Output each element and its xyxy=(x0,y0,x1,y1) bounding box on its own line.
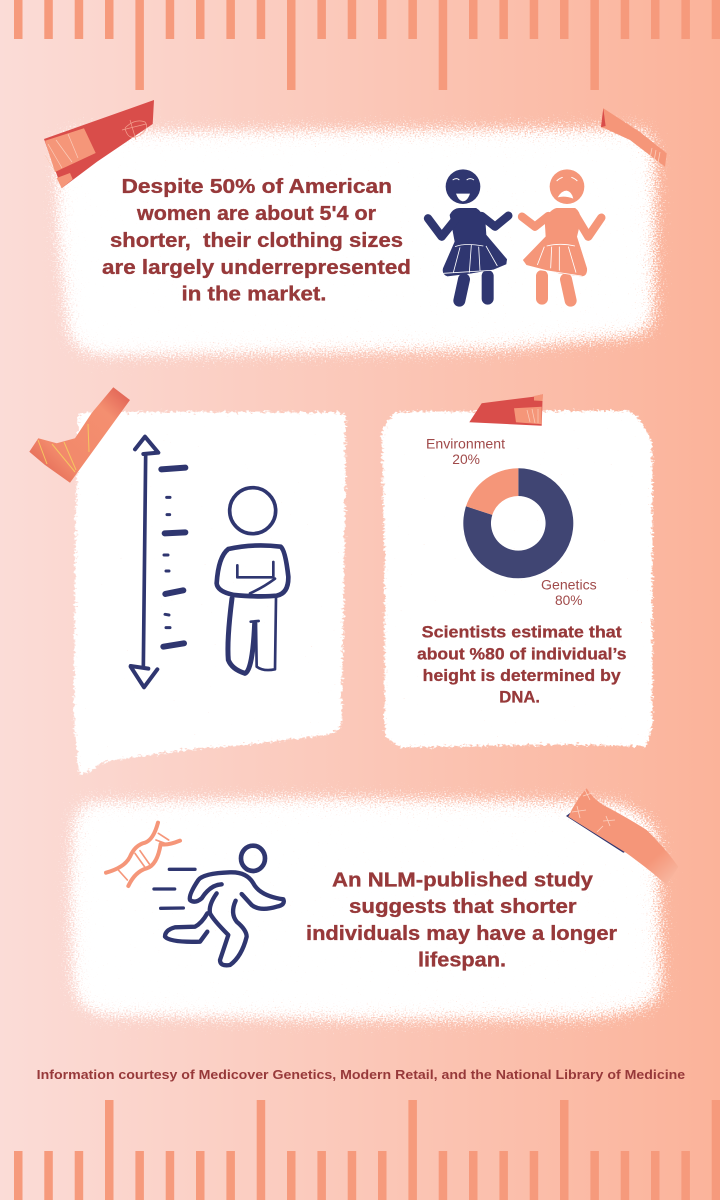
text: clothing sizes statement: shorter, their clothing sizes xyxy=(110,230,403,252)
tape: top right with stars xyxy=(566,788,678,885)
tape: top red xyxy=(469,394,543,426)
text: lifespan statement xyxy=(306,870,617,972)
tape: top right peach xyxy=(601,108,667,167)
icon: DNA helix xyxy=(106,823,180,886)
text: lifespan statement: suggests that shorter xyxy=(349,896,577,918)
panel: height ruler xyxy=(29,387,346,778)
label: environment: Environment xyxy=(426,436,505,452)
text: clothing sizes statement: women are about 5'4 or xyxy=(136,203,376,225)
label: genetics: Genetics xyxy=(541,578,597,592)
label: genetics xyxy=(541,578,597,608)
bottom ruler ticks xyxy=(14,1100,720,1200)
text: lifespan statement: individuals may have a longer xyxy=(306,923,617,945)
panel: lifespan xyxy=(68,788,678,1022)
text: lifespan statement: lifespan. xyxy=(418,950,506,972)
tape: top left red xyxy=(44,100,154,188)
text: clothing sizes statement: in the market. xyxy=(182,284,326,306)
panel: clothing sizes xyxy=(44,100,667,358)
text: DNA statement xyxy=(417,623,626,707)
text: DNA statement: Scientists estimate that xyxy=(422,623,622,642)
icon: two girls xyxy=(428,169,601,301)
text: DNA statement: DNA. xyxy=(499,688,540,707)
icon: sad girl xyxy=(522,169,601,301)
icon: height arrow with ticks xyxy=(131,437,185,687)
text: lifespan statement: An NLM-published study xyxy=(332,870,594,892)
label: environment xyxy=(426,436,505,467)
icon: happy girl xyxy=(428,169,508,301)
text: clothing sizes statement: Despite 50% of American xyxy=(122,176,392,198)
panel: genetics donut xyxy=(381,394,653,748)
icon: standing person xyxy=(217,488,288,673)
icon: running person xyxy=(154,846,284,965)
chart: genetics vs environment donut xyxy=(426,436,597,608)
label: genetics: 80% xyxy=(555,593,582,608)
text: clothing sizes statement: are largely underrepresented xyxy=(102,257,411,279)
text: DNA statement: about %80 of individual’s xyxy=(417,644,626,664)
text: clothing sizes statement xyxy=(102,176,411,306)
tape: checkmark xyxy=(29,387,130,483)
label: environment: 20% xyxy=(452,452,480,467)
top ruler ticks xyxy=(14,0,720,90)
text: DNA statement: height is determined by xyxy=(423,666,621,685)
footer: sources: Information courtesy of Medicover Genetics, Modern Retail, and the National Library of Medicine xyxy=(37,1068,685,1082)
